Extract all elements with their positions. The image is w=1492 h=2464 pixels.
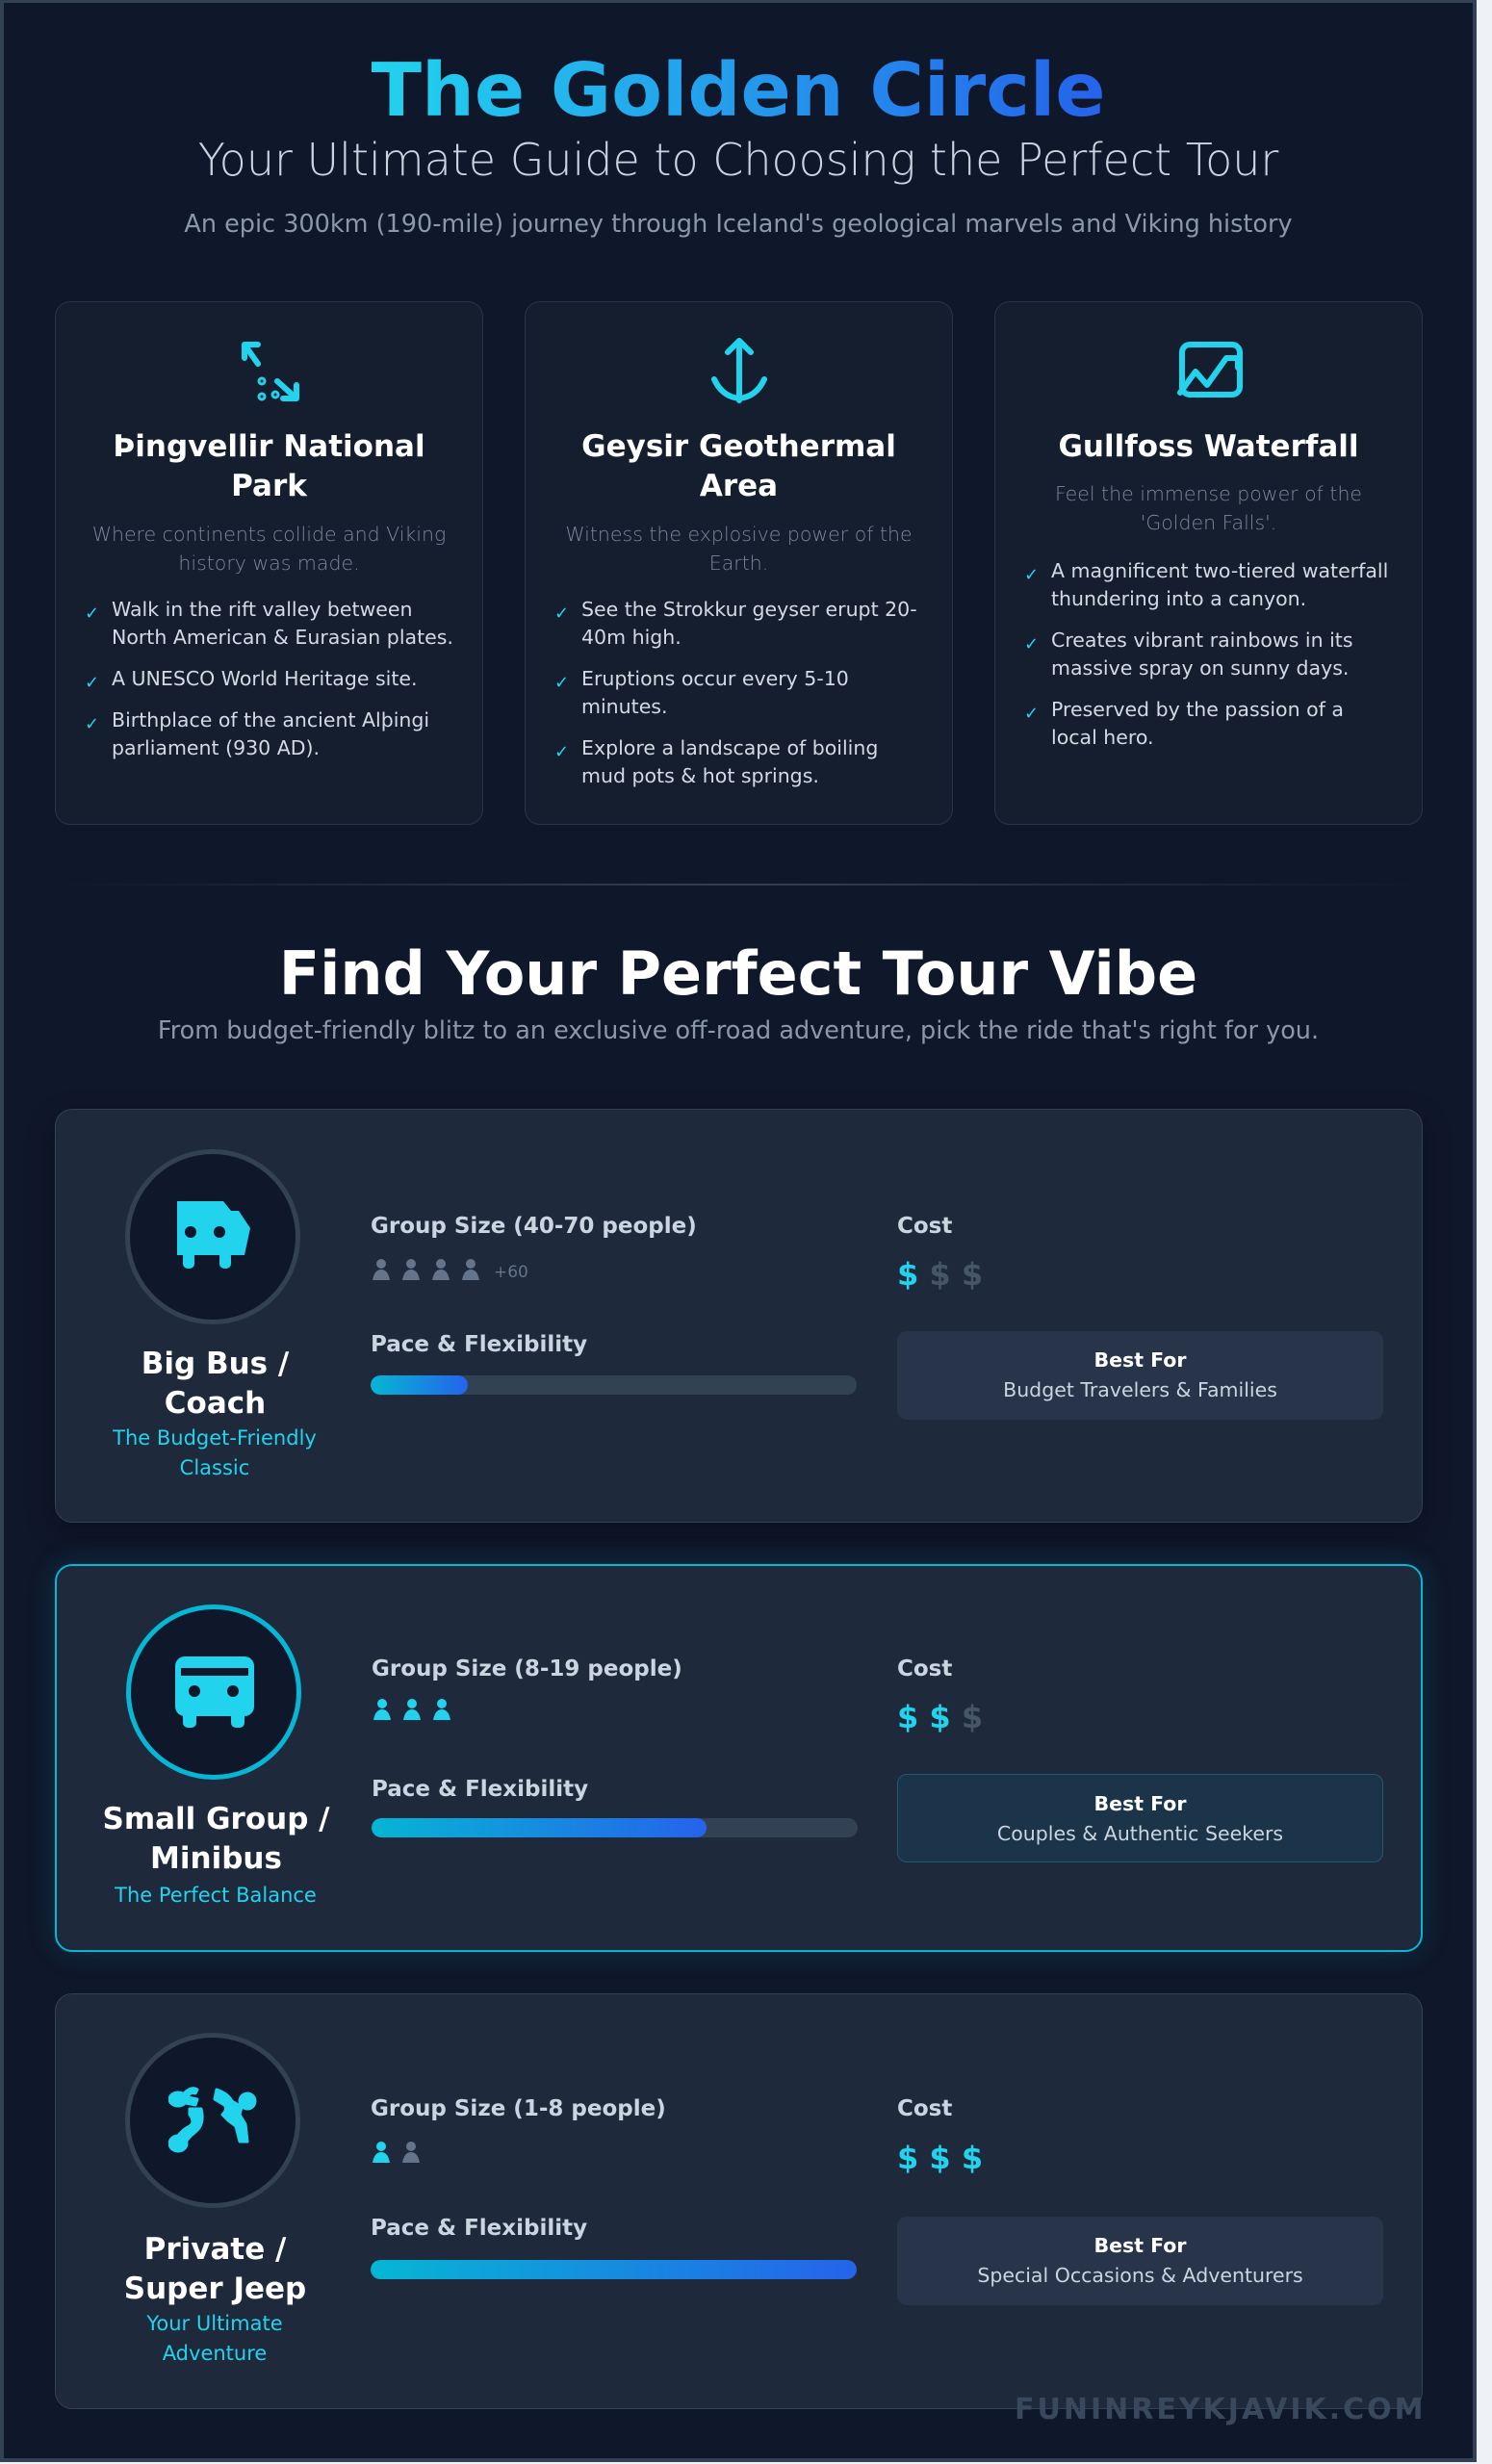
description: Where continents collide and Viking history was made.	[92, 523, 446, 575]
best for	[897, 1774, 1383, 1862]
bullet list: A UNESCO World Heritage site.	[112, 667, 418, 690]
icon: bus	[125, 1149, 300, 1324]
panel: big bus	[55, 1109, 1423, 1523]
panel: gullfoss	[994, 301, 1423, 825]
tagline: The Budget-Friendly Classic	[113, 1426, 317, 1479]
bullet list: Walk in the rift valley between North American & Eurasian plates.	[112, 598, 453, 649]
tagline: An epic 300km (190-mile) journey through Iceland's geological marvels and Viking history	[184, 210, 1293, 239]
section heading: Find Your Perfect Tour Vibe	[279, 938, 1197, 1009]
bullet list: local hero.	[1051, 726, 1154, 749]
watermark: FUNINREYKJAVIK.COM	[1015, 2393, 1427, 2426]
cost: Cost	[897, 1214, 952, 1239]
best for: Best For	[1093, 2234, 1187, 2257]
pace label: Pace & Flexibility	[372, 1777, 588, 1802]
cost rating: $ $ $	[897, 1699, 983, 1735]
tagline: Your Ultimate Adventure	[146, 2312, 283, 2365]
name: Small Group /	[102, 1802, 329, 1836]
bullet list: A magnificent two-tiered waterfall thundering into a canyon.	[1051, 559, 1388, 610]
cost rating: $ $ $	[897, 1256, 983, 1293]
panel: thingvellir	[55, 301, 483, 825]
bullet list: See the Strokkur geyser erupt 20-40m high.	[581, 598, 917, 649]
bullet list	[556, 598, 917, 787]
best for: Couples & Authentic Seekers	[997, 1822, 1283, 1845]
panel: private jeep	[55, 1993, 1423, 2409]
panel: geysir	[525, 301, 953, 825]
bullet list	[1026, 559, 1388, 749]
group size: Group Size (1-8 people)	[371, 2096, 666, 2121]
cost: Cost	[897, 1656, 952, 1681]
people icons: +60	[494, 1263, 528, 1282]
bullet list: Preserved by the passion of a	[1051, 698, 1344, 721]
bullet list	[87, 598, 453, 759]
people icons	[373, 1259, 528, 1282]
group size: Group Size (8-19 people)	[372, 1656, 682, 1681]
group size: Group Size (40-70 people)	[371, 1214, 697, 1239]
bullet list: Eruptions occur every 5-10 minutes.	[581, 667, 849, 718]
tagline: The Perfect Balance	[115, 1884, 317, 1907]
pace bar	[371, 2260, 857, 2279]
title: The Golden Circle	[372, 48, 1105, 134]
name: Coach	[165, 1386, 266, 1421]
bullet list: Birthplace of the ancient Alþingi parliament (930 AD).	[112, 708, 429, 759]
name: Private /	[144, 2232, 286, 2267]
name	[124, 2232, 306, 2306]
heading: Þingvellir National Park	[113, 429, 425, 503]
icon: geyser arrow	[711, 338, 767, 403]
cost rating: $ $ $	[897, 2140, 983, 2176]
best for	[897, 2217, 1383, 2305]
bullet list: Explore a landscape of boiling mud pots & hot springs.	[581, 736, 878, 787]
pace bar	[372, 1818, 858, 1837]
best for	[897, 1331, 1383, 1420]
icon: rift arrows	[242, 342, 299, 401]
icon: adventurers	[125, 2033, 300, 2208]
description: Witness the explosive power of the Earth.	[565, 523, 913, 575]
name: Big Bus /	[141, 1347, 289, 1381]
name	[141, 1347, 289, 1421]
name: Super Jeep	[124, 2272, 306, 2306]
people icons	[373, 2142, 420, 2163]
best for: Special Occasions & Adventurers	[977, 2264, 1303, 2287]
best for: Best For	[1093, 1348, 1187, 1372]
heading: Gullfoss Waterfall	[1058, 429, 1359, 464]
cost: Cost	[897, 2096, 952, 2121]
subtitle: Your Ultimate Guide to Choosing the Perfect Tour	[198, 134, 1278, 186]
name	[102, 1802, 329, 1876]
name: Minibus	[150, 1841, 282, 1876]
section subheading: From budget-friendly blitz to an exclusive off-road adventure, pick the ride that's right for you.	[158, 1016, 1319, 1045]
icon: minibus	[126, 1604, 301, 1780]
pace label: Pace & Flexibility	[371, 1332, 587, 1357]
heading: Geysir Geothermal Area	[581, 429, 896, 503]
panel: small group	[55, 1564, 1423, 1952]
icon: waterfall chart	[1177, 342, 1243, 398]
pace label: Pace & Flexibility	[371, 2216, 587, 2241]
pace bar	[371, 1375, 857, 1395]
bullet list: Creates vibrant rainbows in its massive spray on sunny days.	[1051, 629, 1353, 680]
best for: Budget Travelers & Families	[1003, 1378, 1277, 1401]
people icons	[373, 1699, 450, 1720]
description: Feel the immense power of the 'Golden Falls'.	[1055, 482, 1362, 534]
best for: Best For	[1093, 1792, 1187, 1815]
